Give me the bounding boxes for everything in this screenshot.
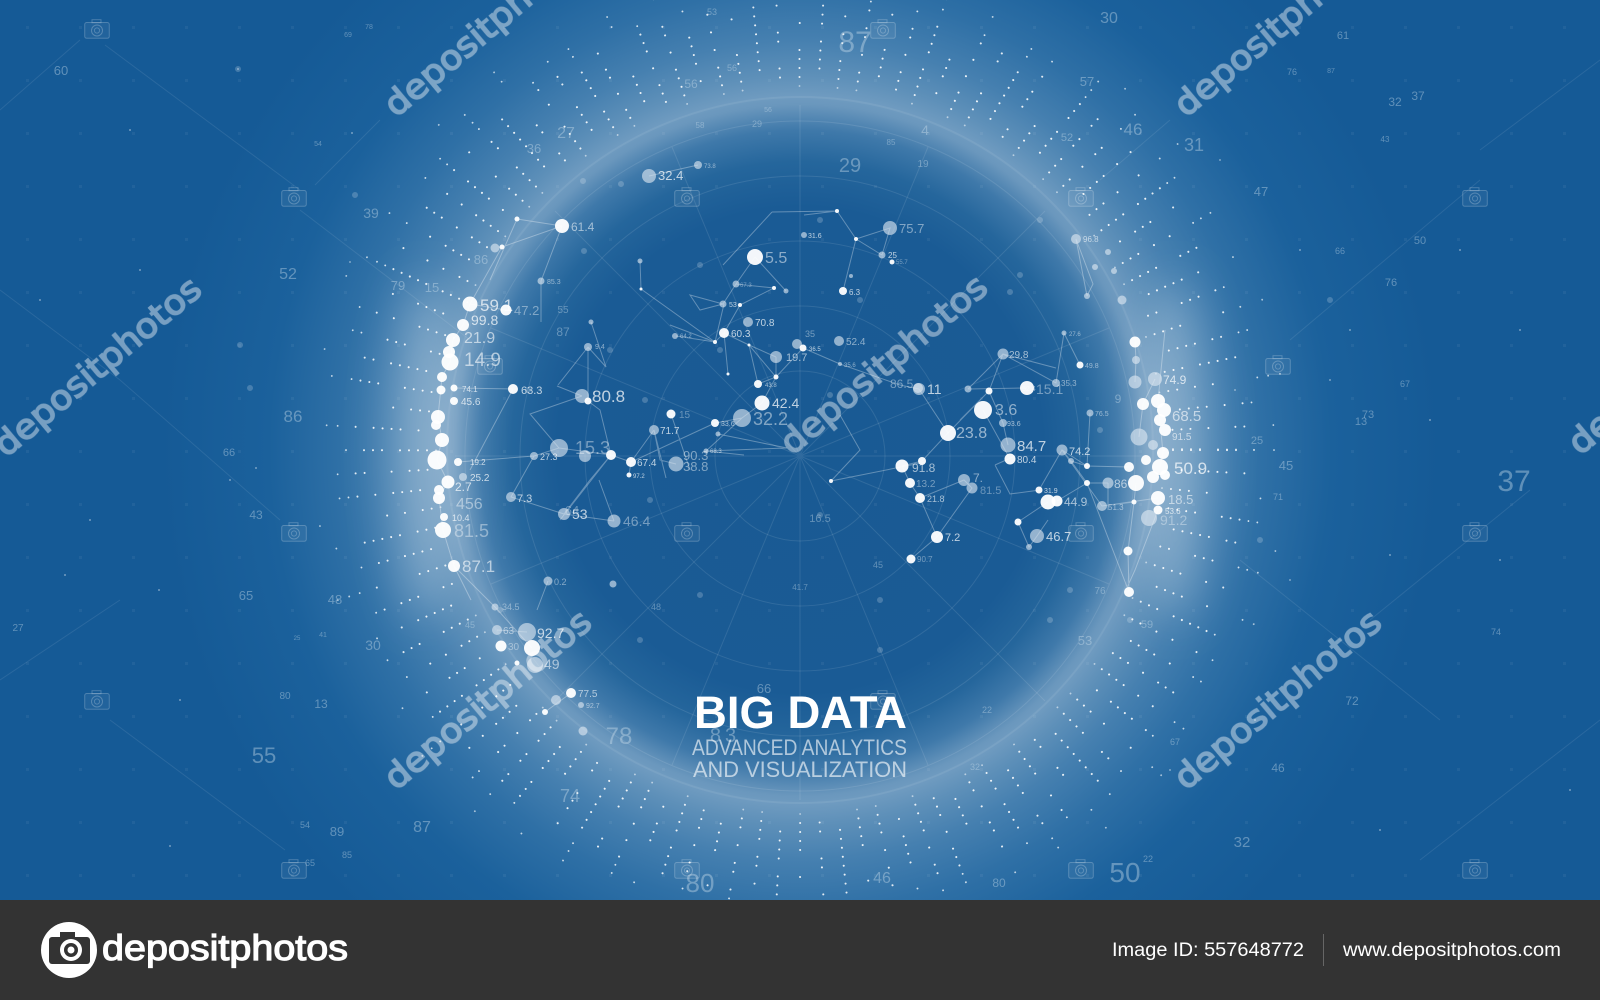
scattered background numbers: 45	[465, 620, 475, 630]
data point value labels: 67.3	[740, 283, 752, 289]
scattered background numbers: 53	[707, 7, 717, 17]
scattered background numbers: 59	[1141, 619, 1153, 631]
data point value labels	[452, 164, 1207, 710]
scattered background numbers: 22	[1143, 854, 1153, 864]
scattered background numbers: 65	[305, 858, 315, 868]
scattered background numbers: 50	[1414, 235, 1426, 247]
scattered background numbers: 56	[727, 63, 737, 73]
scattered background numbers: 87	[838, 26, 872, 59]
data point value labels: 67.4	[637, 458, 657, 469]
scattered background numbers: 80	[686, 868, 714, 898]
data point value labels: 76.5	[1095, 411, 1109, 418]
data point value labels: 63	[503, 626, 515, 637]
scattered background numbers: 37	[1497, 465, 1531, 498]
scattered background numbers: 64	[565, 503, 579, 518]
scattered background numbers: 56	[764, 107, 772, 114]
data point value labels: 15.1	[1036, 381, 1063, 397]
data point value labels: 11	[927, 381, 942, 397]
watermark text	[0, 0, 1600, 798]
image id: Image ID: 557648772	[1112, 940, 1304, 961]
scattered background numbers: 76	[1094, 586, 1106, 597]
scattered background numbers: 85	[887, 138, 896, 147]
data point value labels: 49.8	[1085, 363, 1099, 370]
scattered background numbers: 30	[365, 637, 381, 653]
scattered background numbers: 43	[1381, 135, 1390, 144]
data point value labels: 6.3	[849, 288, 861, 297]
scattered background numbers: 52	[279, 266, 297, 283]
scattered background numbers: 47	[1254, 184, 1268, 199]
scattered background numbers: 85	[342, 850, 352, 860]
data point value labels: 35	[805, 329, 815, 339]
scattered background numbers: 31	[1184, 135, 1204, 155]
scattered background numbers: 27	[12, 623, 24, 634]
data point value labels: 74.2	[1069, 446, 1090, 458]
scattered background numbers: 79	[391, 278, 405, 293]
logo wordmark: depositphotos	[102, 927, 348, 968]
scattered background numbers: 46	[1124, 120, 1142, 139]
data point value labels: 7.2	[945, 532, 960, 544]
scattered background numbers: 37	[1411, 89, 1425, 103]
data point value labels: 13.2	[916, 479, 936, 490]
data point value labels: 68.3	[710, 449, 722, 455]
data point value labels: 9.4	[595, 344, 605, 351]
data point value labels: 3.6	[995, 402, 1017, 419]
data point value labels: 64.2	[680, 334, 692, 340]
data point value labels: 25.2	[470, 473, 490, 484]
data point value labels: 91.8	[912, 461, 936, 475]
scattered background numbers: 67	[1400, 379, 1410, 389]
data point value labels: 29.8	[1009, 350, 1029, 361]
logo icon: camera in circle	[41, 922, 97, 978]
data point value labels: 80.4	[1017, 455, 1037, 466]
scattered background numbers: 4	[921, 122, 929, 138]
scattered background numbers: 72	[1345, 694, 1359, 708]
data point value labels: 53	[572, 506, 588, 522]
data point value labels: 38.8	[683, 459, 708, 474]
data point value labels: 30	[508, 642, 520, 653]
data point value labels: 91.5	[1172, 432, 1192, 443]
data point value labels: 25	[888, 251, 897, 260]
scattered background numbers: 65	[239, 588, 253, 603]
scattered background numbers: 52	[1061, 132, 1073, 144]
scattered background numbers: 50	[1109, 857, 1141, 888]
data nodes: bright nodes	[428, 209, 1171, 715]
scattered background numbers: 46	[1271, 761, 1285, 775]
scattered background numbers: 87	[1327, 68, 1335, 75]
scattered background numbers: 78	[606, 723, 632, 750]
data point value labels: 19.7	[786, 352, 807, 364]
title block	[692, 687, 907, 782]
data point value labels: 42.4	[772, 395, 799, 411]
scattered background numbers: 22	[982, 705, 992, 715]
scattered background numbers: 32	[1388, 95, 1402, 109]
data point value labels: 21.9	[464, 330, 495, 347]
data point value labels: 23.8	[956, 425, 987, 442]
scattered background numbers: 41	[319, 632, 327, 639]
data point value labels: 36.5	[809, 347, 821, 353]
scattered background numbers: 57	[1080, 74, 1094, 89]
scattered background numbers: 54	[300, 820, 310, 830]
data point value labels: 32.4	[658, 168, 683, 183]
data point value labels: 5.5	[765, 250, 787, 267]
scattered background numbers: 76	[1287, 67, 1297, 77]
data point value labels: 92.7	[537, 625, 564, 641]
data point value labels: 52.4	[846, 337, 866, 348]
data point value labels: 32.2	[753, 409, 788, 429]
scattered background numbers: 66	[223, 447, 235, 459]
data point value labels: 59.1	[480, 296, 513, 315]
data point value labels: 87.1	[462, 557, 495, 576]
scattered background numbers: 16.5	[809, 513, 831, 525]
polar grid inside the sphere	[455, 105, 1145, 800]
network lines between data points	[437, 165, 1165, 712]
data point value labels: 34.5	[502, 602, 520, 612]
scattered background numbers: 13	[1355, 416, 1367, 428]
scattered background numbers: 41.7	[792, 583, 808, 592]
data point value labels: 7.	[973, 471, 983, 485]
data point value labels: 86.5	[890, 377, 914, 391]
radial dot field	[314, 0, 1286, 936]
scattered background numbers: 15	[425, 280, 439, 295]
scattered background numbers: 86	[474, 252, 488, 267]
data point value labels: 49	[544, 656, 560, 672]
scattered background numbers: 48	[328, 592, 342, 607]
data point value labels: 18.5	[1168, 492, 1193, 507]
data point value labels: 91.2	[1160, 512, 1187, 528]
scattered background numbers: 80	[279, 691, 291, 702]
data point value labels: 50.9	[1174, 459, 1207, 478]
scattered background numbers: 78	[365, 24, 373, 31]
scattered background numbers: 32	[970, 762, 980, 772]
data point value labels: 51.3	[1108, 503, 1124, 512]
website: www.depositphotos.com	[1342, 940, 1561, 961]
data point value labels: 60.3	[731, 329, 751, 340]
watermark text: depositphotos	[772, 267, 996, 463]
data point value labels: 97.2	[633, 474, 645, 480]
scattered background numbers: 19	[917, 159, 929, 170]
data point value labels: 74.9	[1163, 373, 1187, 387]
scattered background numbers: 43	[249, 508, 263, 522]
scattered background numbers: 36	[527, 141, 541, 156]
data point value labels: 47.2	[514, 303, 539, 318]
data point value labels: 73.8	[704, 164, 716, 170]
data point value labels: 84.7	[1017, 438, 1046, 455]
scattered background numbers: 76	[1385, 277, 1397, 289]
scattered background numbers: 55	[252, 743, 276, 768]
data point value labels: 71.7	[660, 426, 680, 437]
title: BIG DATA	[694, 687, 907, 738]
scattered background numbers: 27	[557, 125, 575, 142]
scattered background numbers: 67	[1170, 737, 1180, 747]
data point value labels: 80.8	[592, 387, 625, 406]
data point value labels: 21.8	[927, 494, 945, 504]
scattered background numbers: 86	[284, 407, 302, 426]
data point value labels: 7.3	[517, 493, 532, 505]
data point value labels: 86	[1114, 477, 1128, 491]
scattered specks	[40, 69, 1570, 846]
data point value labels: 43.8	[765, 383, 777, 389]
scattered background numbers: 46	[873, 870, 891, 887]
data point value labels: 35.3	[1061, 379, 1077, 388]
scattered background numbers: 56	[684, 77, 698, 91]
ring edge highlight	[447, 97, 1153, 803]
data point value labels: 456	[456, 496, 483, 513]
scattered background numbers: 74	[1491, 627, 1501, 637]
data point value labels: 68.5	[1172, 408, 1201, 425]
data point value labels: 55.7	[896, 260, 908, 266]
scattered background numbers: 25	[1251, 435, 1263, 447]
side glow of the sphere	[391, 280, 1209, 620]
scattered background numbers: 58	[696, 121, 705, 130]
footer bar	[0, 900, 1600, 1000]
data point value labels: 63.3	[521, 385, 542, 397]
data point value labels: 10.4	[452, 513, 470, 523]
scattered background numbers: 73	[1362, 409, 1374, 421]
scattered background numbers: 13	[314, 697, 328, 711]
subtitle line two: AND VISUALIZATION	[693, 757, 907, 782]
data point value labels: 0.2	[554, 577, 567, 587]
scattered background numbers: 45	[1279, 458, 1293, 473]
data point value labels: 33.6	[721, 421, 735, 428]
subtitle line one: ADVANCED ANALYTICS	[692, 735, 907, 760]
scattered background numbers: 39	[363, 205, 379, 221]
scattered background numbers: 87	[556, 325, 570, 339]
scattered background numbers: 69	[344, 32, 352, 39]
data point value labels: 46.7	[1046, 529, 1071, 544]
scattered background numbers: 83	[710, 725, 740, 747]
scattered background numbers: 53	[1078, 633, 1092, 648]
scattered background numbers: 80	[992, 876, 1006, 890]
data point value labels: 27.3	[540, 452, 558, 462]
data point value labels: 77.5	[578, 689, 598, 700]
data point value labels: 85.3	[547, 279, 561, 286]
data point value labels: 74.1	[462, 385, 478, 394]
scattered background numbers: 66	[757, 681, 771, 696]
scattered background numbers: 74	[560, 786, 580, 806]
data point value labels: 27.6	[1069, 332, 1081, 338]
data point value labels: 2.7	[455, 480, 472, 494]
data point value labels: 92.7	[586, 703, 600, 710]
scattered background numbers: 61	[1337, 30, 1349, 42]
data point value labels: 19.2	[470, 458, 486, 467]
scattered background numbers: 29	[839, 155, 861, 177]
data point value labels: 53	[729, 302, 737, 309]
data point value labels: 75.7	[899, 221, 924, 236]
scattered background numbers: 54	[314, 141, 322, 148]
scattered background numbers: 89	[330, 824, 344, 839]
data point value labels: 45.6	[461, 397, 481, 408]
watermark camera icons	[85, 20, 1487, 878]
data point value labels: 90.7	[917, 555, 933, 564]
data point value labels: 99.8	[471, 312, 498, 328]
data point value labels: 90.3	[683, 448, 708, 463]
scattered background numbers: 66	[1335, 246, 1345, 256]
scattered background numbers: 45	[873, 560, 883, 570]
data point value labels: 44.9	[1064, 495, 1088, 509]
scattered background numbers: 60	[54, 63, 68, 78]
data point value labels: 35.6	[844, 363, 856, 369]
data point value labels: 46.4	[623, 513, 650, 529]
data point value labels: 81.5	[454, 521, 489, 541]
data point value labels: 15.3	[575, 438, 610, 458]
watermark text: depositphotos	[1166, 602, 1390, 798]
data point value labels: 31.9	[1044, 488, 1058, 495]
scattered background numbers: 71	[1273, 492, 1283, 502]
scattered background numbers: 48	[651, 602, 661, 612]
data point value labels: 31.6	[808, 233, 822, 240]
scattered background numbers: 29	[752, 119, 762, 129]
data point value labels: 93.6	[1007, 421, 1021, 428]
watermark text: depositphotos	[376, 602, 600, 798]
scattered background numbers: 87	[413, 819, 431, 836]
data point value labels: 15	[679, 410, 691, 421]
data point value labels: 81.5	[980, 485, 1001, 497]
data point value labels: 96.8	[1083, 235, 1099, 244]
scattered background numbers: 9	[1115, 392, 1122, 406]
data point value labels: 70.8	[755, 318, 775, 329]
data point value labels: 14.9	[464, 350, 501, 371]
scattered background numbers: 55	[557, 305, 569, 316]
scattered background numbers: 25	[294, 636, 301, 642]
data nodes: dim nodes	[459, 161, 1162, 736]
scattered background numbers: 30	[1100, 10, 1118, 27]
scattered background numbers: 32	[1234, 834, 1250, 851]
data point value labels: 53.6	[1165, 507, 1181, 516]
data point value labels: 52.4	[1022, 386, 1036, 393]
data point value labels: 61.4	[571, 220, 595, 234]
